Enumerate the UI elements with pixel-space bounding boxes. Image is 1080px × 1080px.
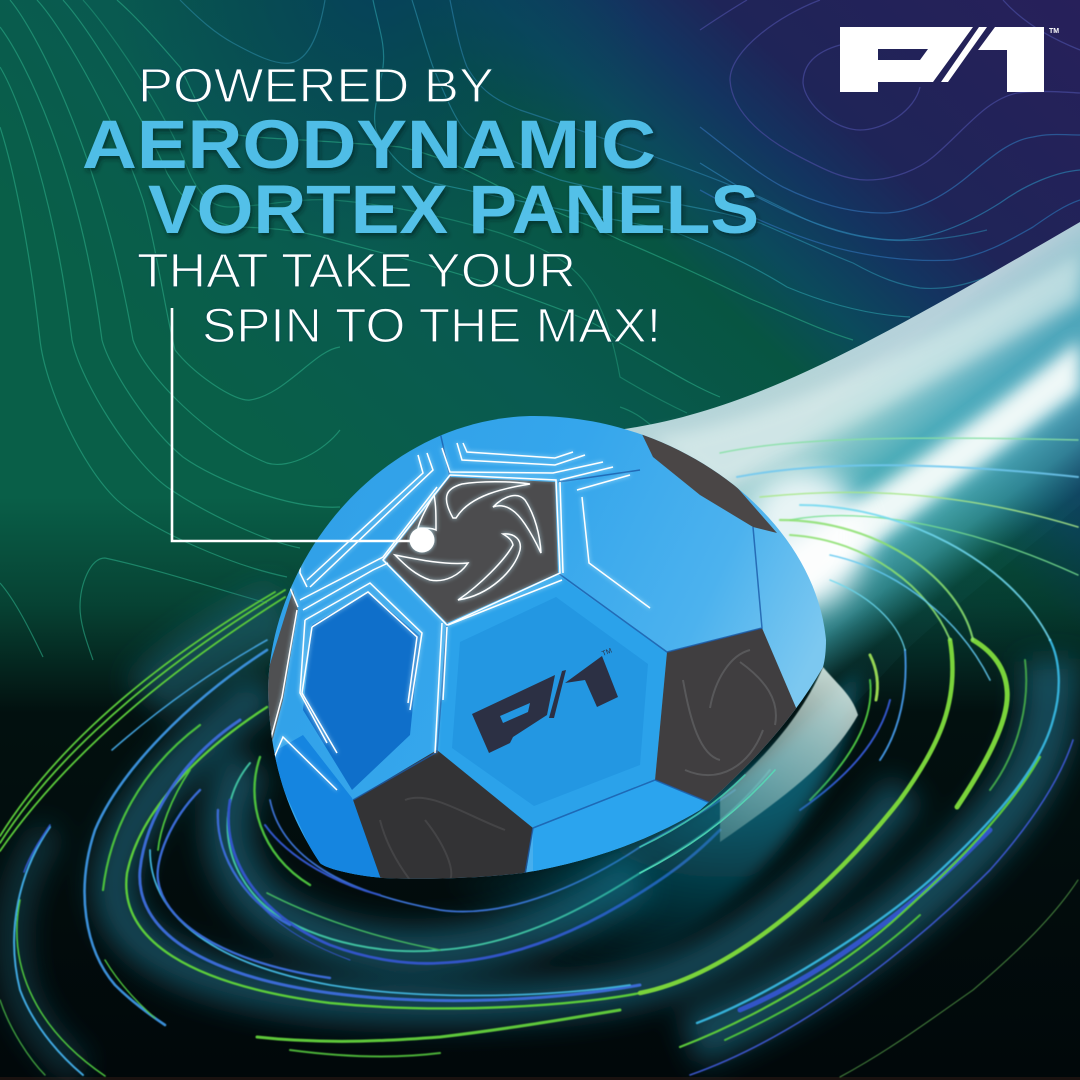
line: powered by: POWERED BY [138, 60, 494, 113]
comet ball glow [745, 470, 865, 610]
line: that take your: THAT TAKE YOUR [137, 245, 576, 298]
P1 logo [840, 27, 1059, 92]
ball seams [353, 432, 762, 880]
ball base [260, 410, 840, 890]
outer left green ring [0, 590, 285, 851]
logo trademark: TM [1049, 28, 1059, 35]
ring C [218, 763, 770, 963]
center hexagon panel [437, 575, 667, 828]
ball P1 logo [472, 656, 618, 753]
ring D [240, 757, 735, 960]
comet bright streak [770, 340, 1080, 600]
left deep blue panel [303, 592, 420, 790]
callout leader line [172, 308, 425, 541]
ring E far left [0, 825, 105, 1076]
swirl rings [0, 590, 1078, 1077]
center panel bevel [452, 597, 648, 806]
upper right dark panel [640, 430, 777, 533]
soccer ball [260, 410, 840, 890]
comet body [600, 222, 1080, 720]
teal haze below ball [430, 670, 860, 963]
over-ball ring streaks [640, 770, 775, 873]
line: vortex panels: VORTEX PANELS [148, 171, 759, 248]
comet trail behind ball [600, 222, 1080, 720]
contour lines, navy right [700, 0, 1080, 260]
vortex black panel [385, 477, 558, 623]
ring A [85, 640, 267, 1025]
lower right blue panel [533, 780, 709, 872]
lower left panel [268, 735, 383, 880]
line: aerodynamic: AERODYNAMIC [82, 106, 656, 183]
ring F bottom and right [257, 640, 1078, 1077]
left dark sliver panel [268, 590, 298, 741]
right vortex emboss [683, 650, 776, 775]
headline text [82, 60, 759, 353]
right black panel [655, 628, 797, 807]
callout dot [410, 528, 434, 552]
line: spin to the max: SPIN TO THE MAX! [202, 300, 661, 353]
glowing panel outlines [267, 443, 650, 790]
vortex swirl [395, 482, 541, 600]
ring glow haze [13, 610, 1051, 1070]
contour lines, green left [0, 0, 987, 660]
ball edge band [720, 667, 858, 842]
ball trademark: TM [601, 648, 613, 658]
bottom vortex emboss [380, 798, 505, 880]
light rings over comet [720, 438, 1078, 680]
comet upper band [650, 255, 1080, 490]
ring B [126, 640, 953, 1008]
bottom black panel [353, 750, 533, 885]
